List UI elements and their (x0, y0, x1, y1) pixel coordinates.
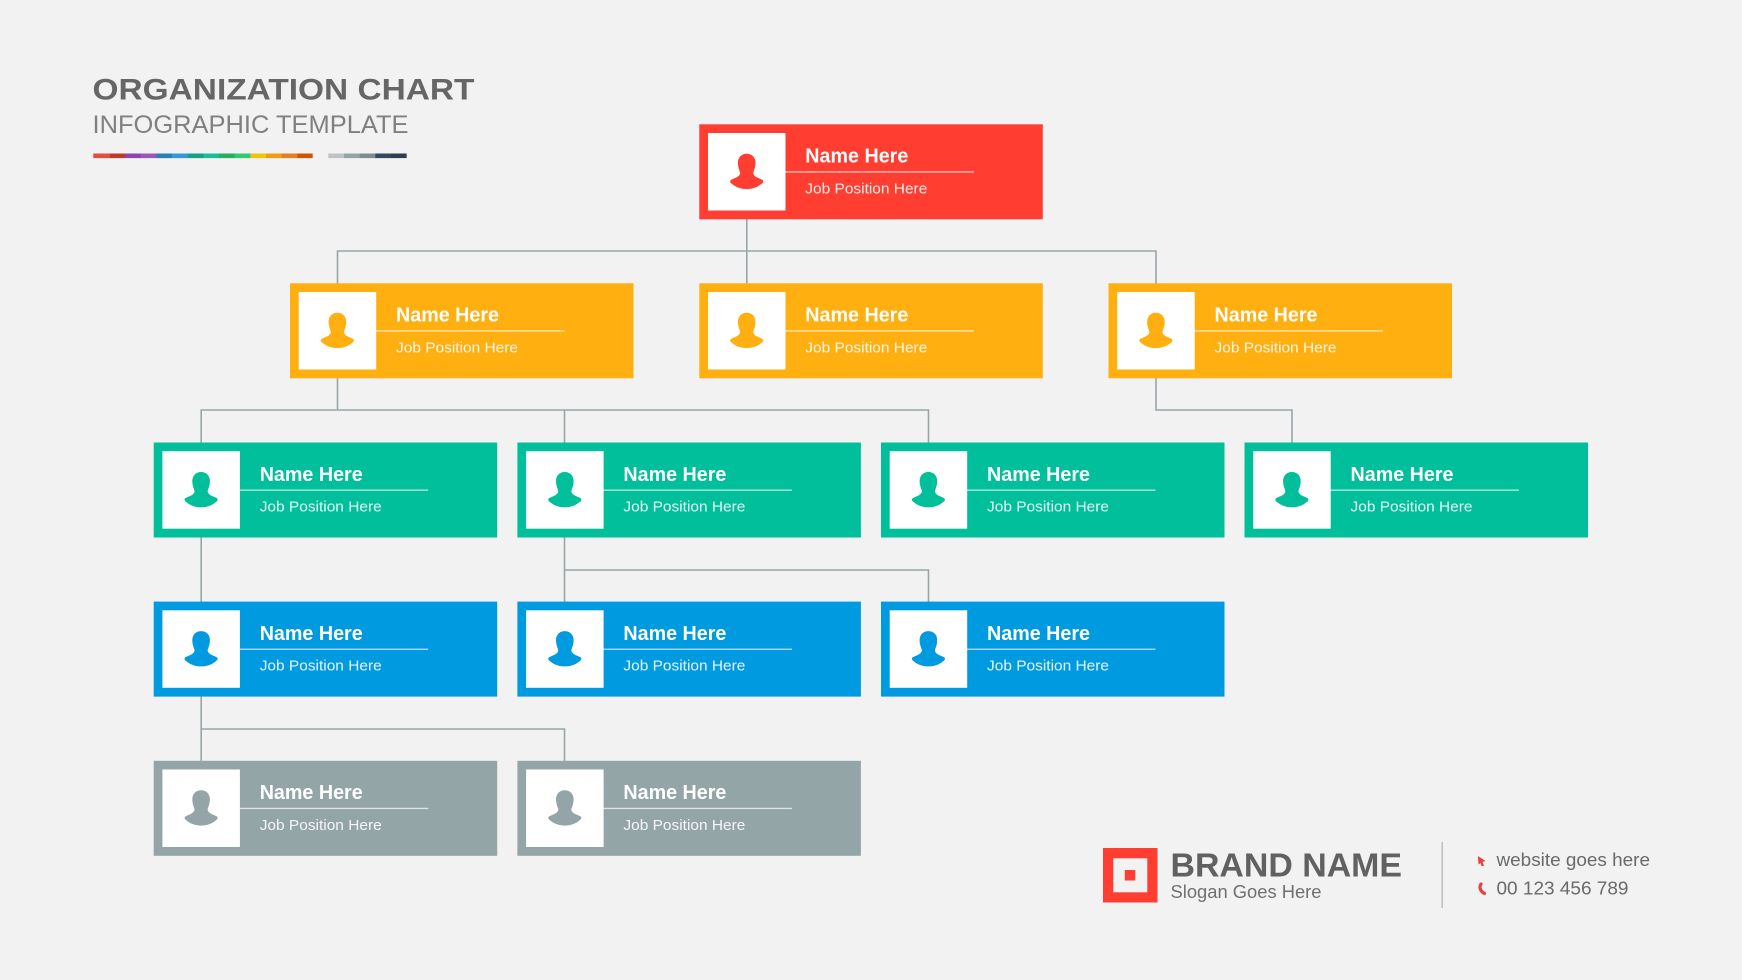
slogan: Slogan Goes Here (1170, 881, 1322, 902)
card: level 2 left (290, 283, 634, 378)
icon: person (548, 790, 581, 826)
position: Job Position Here (805, 339, 927, 356)
position: Job Position Here (1214, 339, 1336, 356)
name: Name Here (987, 464, 1090, 486)
icon: person (185, 631, 218, 666)
card: level 2 centre (699, 283, 1043, 378)
colour strip (93, 154, 407, 158)
position: Job Position Here (1350, 498, 1472, 516)
icon: person (912, 631, 945, 666)
card: level 4 first (154, 602, 497, 697)
position: Job Position Here (396, 339, 518, 356)
name: Name Here (805, 146, 908, 168)
card: level 3 second (517, 442, 861, 538)
card: level 4 third (881, 602, 1224, 697)
phone number: 00 123 456 789 (1496, 878, 1628, 898)
position: Job Position Here (623, 498, 745, 516)
card: level 1 (699, 124, 1043, 219)
card: level 3 first (154, 442, 497, 538)
icon: person (730, 313, 763, 348)
brand block (1103, 848, 1402, 902)
icon: brand logo (1103, 848, 1158, 902)
name: Name Here (987, 623, 1090, 645)
name: Name Here (623, 623, 726, 645)
icon: person (548, 472, 581, 507)
name: Name Here (260, 782, 363, 804)
name: Name Here (623, 782, 726, 804)
position: Job Position Here (805, 180, 927, 197)
name: Name Here (805, 305, 908, 327)
contact block (1478, 849, 1650, 898)
position: Job Position Here (260, 658, 382, 675)
icon: cursor (1478, 856, 1486, 866)
card: level 2 right (1108, 283, 1452, 378)
card: level 5 second (517, 761, 861, 856)
name: Name Here (1214, 305, 1318, 327)
position: Job Position Here (987, 658, 1109, 675)
name: Name Here (260, 623, 363, 645)
position: Job Position Here (260, 498, 382, 516)
subheading: INFOGRAPHIC TEMPLATE (92, 111, 408, 139)
icon: person (1275, 472, 1308, 507)
heading: ORGANIZATION CHART (92, 74, 474, 106)
position: Job Position Here (623, 817, 745, 834)
card: level 4 second (517, 602, 861, 697)
title block (92, 74, 474, 158)
connector lines (201, 219, 1292, 761)
brand name: BRAND NAME (1170, 848, 1402, 885)
position: Job Position Here (987, 498, 1109, 516)
name: Name Here (623, 464, 726, 486)
divider (1442, 842, 1443, 908)
card: level 3 fourth (1244, 442, 1588, 538)
website: website goes here (1495, 849, 1650, 870)
icon: person (185, 790, 218, 826)
card: level 5 first (154, 761, 497, 856)
card: level 3 third (881, 442, 1224, 538)
icon: person (912, 472, 945, 507)
name: Name Here (396, 305, 499, 327)
icon: person (730, 154, 763, 189)
icon: person (321, 313, 354, 348)
name: Name Here (260, 464, 363, 486)
position: Job Position Here (623, 658, 745, 675)
icon: phone (1480, 884, 1484, 894)
position: Job Position Here (260, 817, 382, 834)
name: Name Here (1350, 464, 1454, 486)
icon: person (548, 631, 581, 666)
icon: person (185, 472, 218, 507)
icon: person (1139, 313, 1172, 348)
